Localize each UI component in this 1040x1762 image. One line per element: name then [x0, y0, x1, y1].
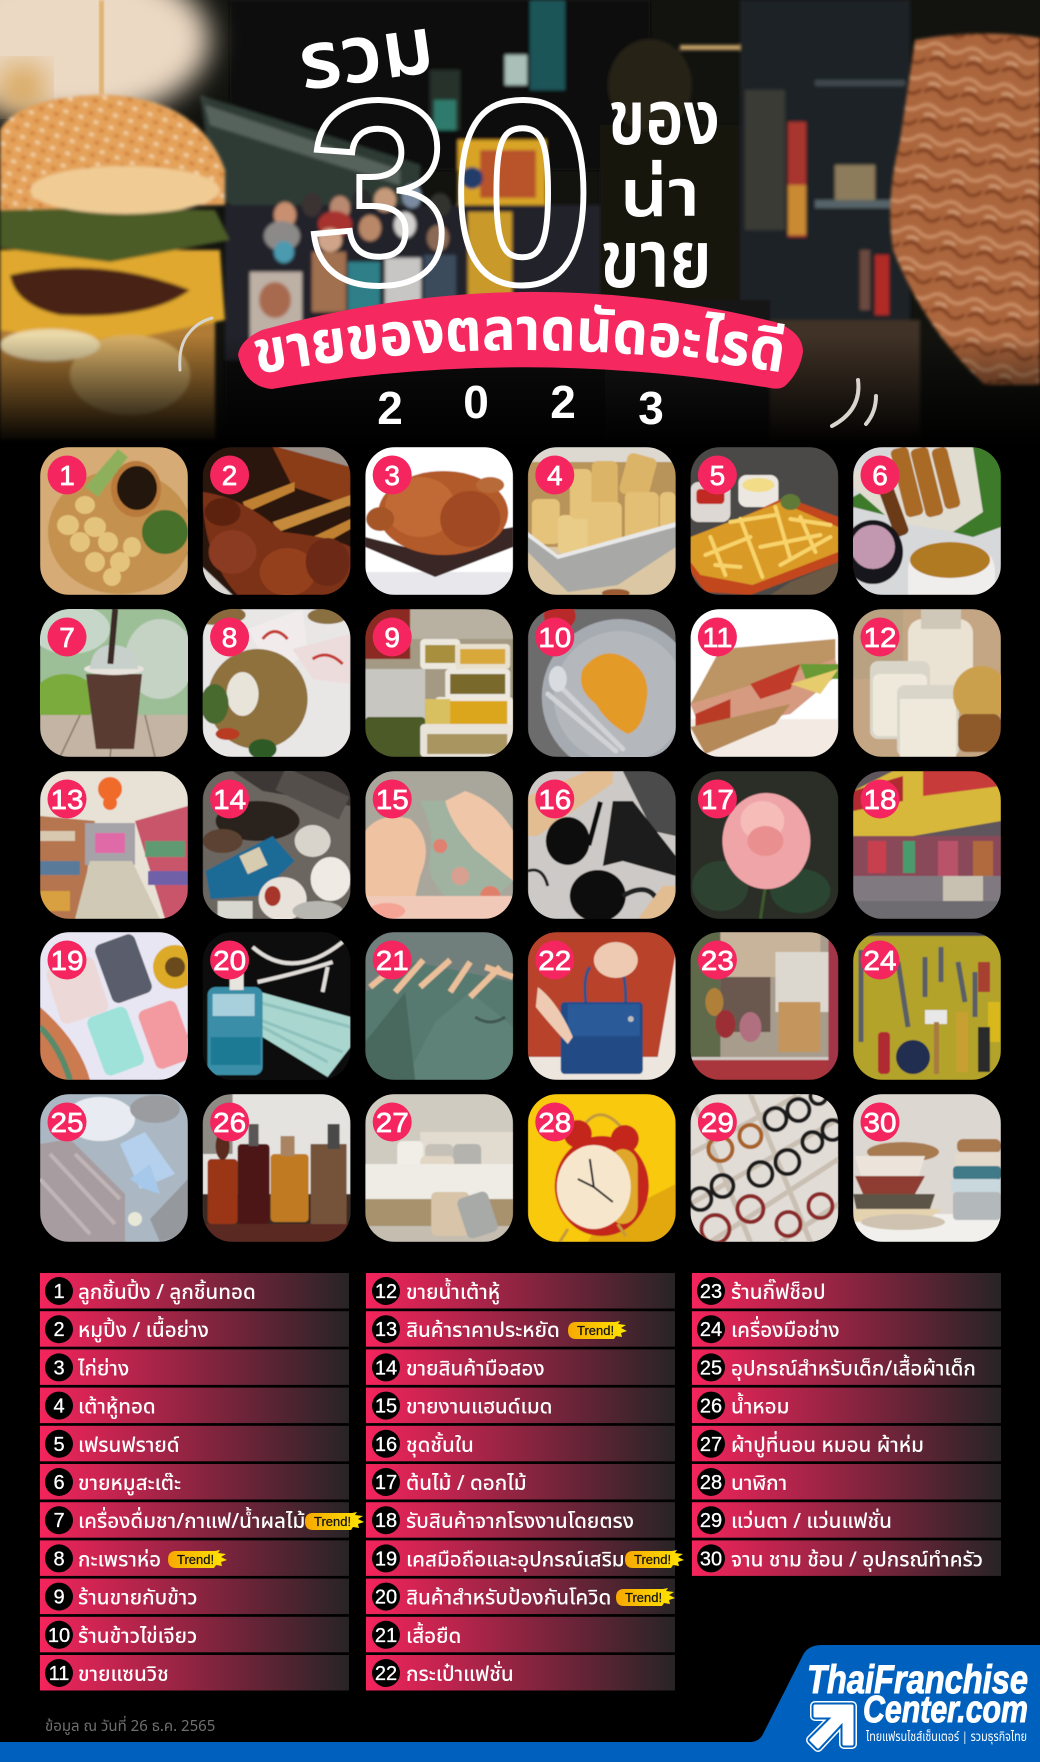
badge 11: 11 — [702, 622, 732, 653]
tile 12: soy milk — [853, 609, 1009, 757]
tile 13: bargain shop — [40, 771, 188, 919]
trend badge: row 8: Trend! — [177, 1552, 214, 1567]
tile 1: fish balls — [40, 447, 192, 595]
list column 2: ชุดชั้นใน — [406, 1431, 474, 1462]
badge 9 — [373, 618, 412, 656]
badge 10 — [535, 618, 574, 656]
list column 3: 25 — [700, 1357, 722, 1379]
tile 28: red alarm clock — [528, 1094, 676, 1242]
data date note: ข้อมูล ณ วันที่ 26 ธ.ค. 2565 — [45, 1715, 215, 1738]
year 2023: 2 — [377, 382, 403, 434]
badge 9: 9 — [384, 622, 400, 653]
list column 2: 12 — [375, 1281, 397, 1303]
trend badge: row 13: Trend! — [577, 1323, 614, 1338]
list column 3: นาฬิกา — [731, 1469, 787, 1500]
badge 19 — [48, 940, 86, 980]
list column 1: หมูปิ้ง / เนื้อย่าง — [78, 1316, 209, 1347]
list column 3: 24 — [700, 1319, 722, 1341]
list column 1: เต้าหู้ทอด — [78, 1393, 156, 1424]
tile 25: baby clothes — [40, 1094, 188, 1242]
list column 1: เครื่องดื่มชา/กาแฟ/น้ำผลไม้ — [78, 1507, 305, 1538]
list column 2: 18 — [375, 1510, 397, 1532]
list column 1 — [40, 1273, 349, 1691]
badge 26: 26 — [213, 1107, 246, 1138]
badge 17: 17 — [701, 784, 734, 815]
badge 3 — [373, 456, 412, 494]
title: ของ น่า ขาย: ของ — [608, 64, 720, 179]
badge 2 — [210, 456, 249, 494]
tile 4: fried tofu — [528, 447, 676, 597]
trend badge: row 7 — [305, 1512, 364, 1530]
tile 14: second-hand goods — [203, 767, 351, 921]
trend badge: row 19 — [625, 1550, 684, 1568]
badge 29 — [698, 1102, 737, 1142]
tile 9: curry trays — [365, 609, 513, 757]
list column 1: ขายแซนวิช — [78, 1660, 169, 1691]
list column 1: 3 — [53, 1357, 65, 1379]
list column 2: กระเป๋าแฟชั่น — [406, 1660, 514, 1691]
title: big outlined 30: 30 — [308, 46, 594, 339]
trend badge: row 20 — [616, 1588, 675, 1606]
badge 7: 7 — [59, 622, 75, 653]
badge 23 — [698, 940, 737, 980]
tile 21: t-shirts on hangers — [365, 932, 513, 1080]
badge 14 — [210, 780, 249, 818]
list column 3: 28 — [700, 1472, 722, 1494]
badge 28 — [535, 1102, 574, 1142]
badge 3: 3 — [384, 460, 400, 491]
header photo collage background — [0, 0, 1040, 445]
badge 11 — [698, 618, 737, 656]
badge 27: 27 — [376, 1107, 409, 1138]
badge 16: 16 — [538, 784, 571, 815]
list column 3: 29 — [700, 1510, 722, 1532]
list column 1: 2 — [53, 1319, 65, 1341]
list column 2: เสื้อยืด — [406, 1622, 461, 1653]
list column 1: ลูกชิ้นปิ้ง / ลูกชิ้นทอด — [78, 1278, 256, 1309]
badge 10: 10 — [538, 622, 571, 653]
list column 2: ขายสินค้ามือสอง — [406, 1354, 545, 1385]
tile 22: navy handbag — [528, 932, 676, 1080]
list column 1: 9 — [53, 1587, 65, 1609]
list column 3: อุปกรณ์สำหรับเด็ก/เสื้อผ้าเด็ก — [731, 1354, 976, 1385]
badge 20: 20 — [213, 945, 246, 976]
year 2023: 2 — [550, 376, 576, 428]
list column 1: 4 — [53, 1396, 65, 1418]
list column 2: 13 — [375, 1319, 397, 1341]
list column 3: ร้านกิ๊ฟช็อป — [731, 1278, 826, 1309]
trend badge: row 8 — [168, 1550, 227, 1568]
badge 8: 8 — [222, 622, 237, 653]
list column 2: 16 — [375, 1434, 397, 1456]
badge 24: 24 — [864, 945, 896, 976]
list column 2: สินค้าราคาประหยัด — [406, 1316, 560, 1347]
badge 21: 21 — [376, 945, 409, 976]
banner: ขายของตลาดนัดอะไรดี: ขายของตลาดนัดอะไรดี — [254, 304, 785, 372]
year 2023: 3 — [638, 382, 664, 434]
list column 3: 30 — [700, 1548, 722, 1570]
tile 3: roast chicken — [365, 447, 513, 595]
title: ของ น่า ขาย: ขาย — [600, 202, 712, 323]
badge 6 — [860, 456, 900, 494]
tile 6: satay — [843, 446, 1001, 595]
list column 2: 22 — [375, 1663, 397, 1685]
badge 4: 4 — [547, 460, 563, 491]
tile 23: gift shop window — [690, 932, 838, 1080]
list column 3: น้ำหอม — [731, 1393, 789, 1424]
badge 30: 30 — [864, 1107, 896, 1138]
badge 8 — [210, 618, 249, 656]
tile 26: perfume bottles — [203, 1094, 351, 1242]
badge 4 — [535, 456, 574, 494]
list column 2: เคสมือถือและอุปกรณ์เสริม — [406, 1545, 625, 1576]
list column 3: 27 — [700, 1434, 722, 1456]
badge 13 — [48, 780, 86, 818]
tile 2: grilled pork — [203, 447, 351, 596]
tile 7: iced chocolate — [40, 609, 188, 757]
badge 1 — [48, 456, 86, 494]
badge 14: 14 — [213, 784, 246, 815]
year 2023: 0 — [463, 376, 489, 428]
list column 1: 5 — [53, 1434, 65, 1456]
badge 30 — [860, 1102, 900, 1142]
list column 2: 20 — [375, 1587, 397, 1609]
badge 6: 6 — [872, 460, 888, 491]
badge 12 — [860, 618, 900, 656]
list column 2: 17 — [375, 1472, 397, 1494]
tile 30: kitchenware — [853, 1094, 1001, 1242]
badge 18 — [860, 780, 900, 818]
badge 29: 29 — [701, 1107, 734, 1138]
list column 1: ร้านขายกับข้าว — [78, 1584, 198, 1615]
tile 15: knitting hands — [365, 771, 513, 919]
list column 2: ขายงานแฮนด์เมด — [406, 1393, 552, 1424]
list column 1: เฟรนฟรายด์ — [78, 1431, 180, 1462]
badge 15: 15 — [376, 784, 409, 815]
list column 2: 14 — [375, 1357, 397, 1379]
list column 3: แว่นตา / แว่นแฟชั่น — [731, 1507, 892, 1538]
list column 1: 10 — [48, 1625, 70, 1647]
list column 2 — [366, 1273, 675, 1691]
badge 21 — [373, 940, 412, 980]
list column 3 — [692, 1273, 1001, 1576]
list column 3: 23 — [700, 1281, 722, 1303]
tile 11: sandwich — [690, 609, 838, 757]
tile 18: factory outlet shop — [853, 771, 1001, 919]
list column 1: ขายหมูสะเต๊ะ — [78, 1469, 181, 1500]
badge 17 — [698, 780, 737, 818]
badge 22: 22 — [538, 945, 571, 976]
list column 2: 15 — [375, 1396, 397, 1418]
tile 29: eyeglasses — [689, 1088, 842, 1243]
list column 1: ไก่ย่าง — [77, 1354, 129, 1385]
badge 20 — [210, 940, 249, 980]
list column 1: 1 — [53, 1281, 65, 1303]
list column 3: ผ้าปูที่นอน หมอน ผ้าห่ม — [731, 1431, 924, 1462]
list column 2: ต้นไม้ / ดอกไม้ — [406, 1469, 527, 1500]
list column 1: 7 — [53, 1510, 65, 1532]
badge 5: 5 — [710, 460, 725, 491]
list column 1: 8 — [53, 1548, 65, 1570]
list column 1: กะเพราห่อ — [78, 1545, 161, 1576]
tile 5: french fries — [690, 447, 838, 595]
badge 28: 28 — [538, 1107, 571, 1138]
trend badge: row 19: Trend! — [634, 1552, 671, 1567]
badge 15 — [373, 780, 412, 818]
list column 1: 6 — [53, 1472, 65, 1494]
logo: ThaiFranchise Center.com — [807, 1658, 1028, 1747]
badge 23: 23 — [701, 945, 734, 976]
trend badge: row 20: Trend! — [625, 1590, 662, 1605]
badge 16 — [535, 780, 574, 818]
badge 5 — [698, 456, 737, 494]
tile 27: bedding — [365, 1094, 513, 1242]
title: ของ น่า ขาย — [600, 64, 720, 323]
tile 19: phone cases — [40, 932, 197, 1080]
tile 8: basil rice — [202, 609, 351, 757]
badge 13: 13 — [50, 784, 84, 815]
list column 2: ขายน้ำเต้าหู้ — [406, 1278, 500, 1309]
badge 26 — [210, 1102, 249, 1142]
badge 2: 2 — [222, 460, 237, 491]
badge 7 — [48, 618, 86, 656]
list column 1: ร้านข้าวไข่เจียว — [78, 1622, 197, 1653]
decorative brackets — [180, 318, 876, 426]
badge 27 — [373, 1102, 412, 1142]
badge 18: 18 — [864, 784, 896, 815]
year 2023 — [377, 376, 664, 434]
footer bar and logo panel — [0, 1645, 1040, 1762]
trend badge: row 7: Trend! — [314, 1514, 351, 1529]
trend badge: row 13 — [568, 1321, 627, 1339]
list column 1: 11 — [49, 1663, 69, 1685]
tile 16: lingerie — [528, 771, 676, 922]
list column 3: จาน ชาม ช้อน / อุปกรณ์ทำครัว — [731, 1545, 983, 1576]
list column 3: เครื่องมือช่าง — [731, 1316, 840, 1347]
badge 1: 1 — [59, 460, 75, 491]
icon: logo arrow — [811, 1706, 852, 1747]
list column 2: 19 — [375, 1548, 397, 1570]
tile 24: tool pegboard — [853, 932, 1001, 1080]
badge 24 — [860, 940, 900, 980]
tile 20: sanitiser and mask — [203, 932, 351, 1080]
badge 25: 25 — [50, 1107, 84, 1138]
list column 2: 21 — [375, 1625, 397, 1647]
list column 2: สินค้าสำหรับป้องกันโควิด — [406, 1584, 611, 1615]
tile 10: omelette — [528, 609, 676, 757]
title: ของ น่า ขาย: น่า — [620, 146, 700, 246]
badge 19: 19 — [50, 945, 84, 976]
tile 17: pink rose — [690, 771, 838, 919]
list column 3: 26 — [700, 1396, 722, 1418]
badge 25 — [48, 1102, 86, 1142]
list column 2: รับสินค้าจากโรงงานโดยตรง — [406, 1507, 634, 1538]
badge 22 — [535, 940, 574, 980]
badge 12: 12 — [864, 622, 896, 653]
